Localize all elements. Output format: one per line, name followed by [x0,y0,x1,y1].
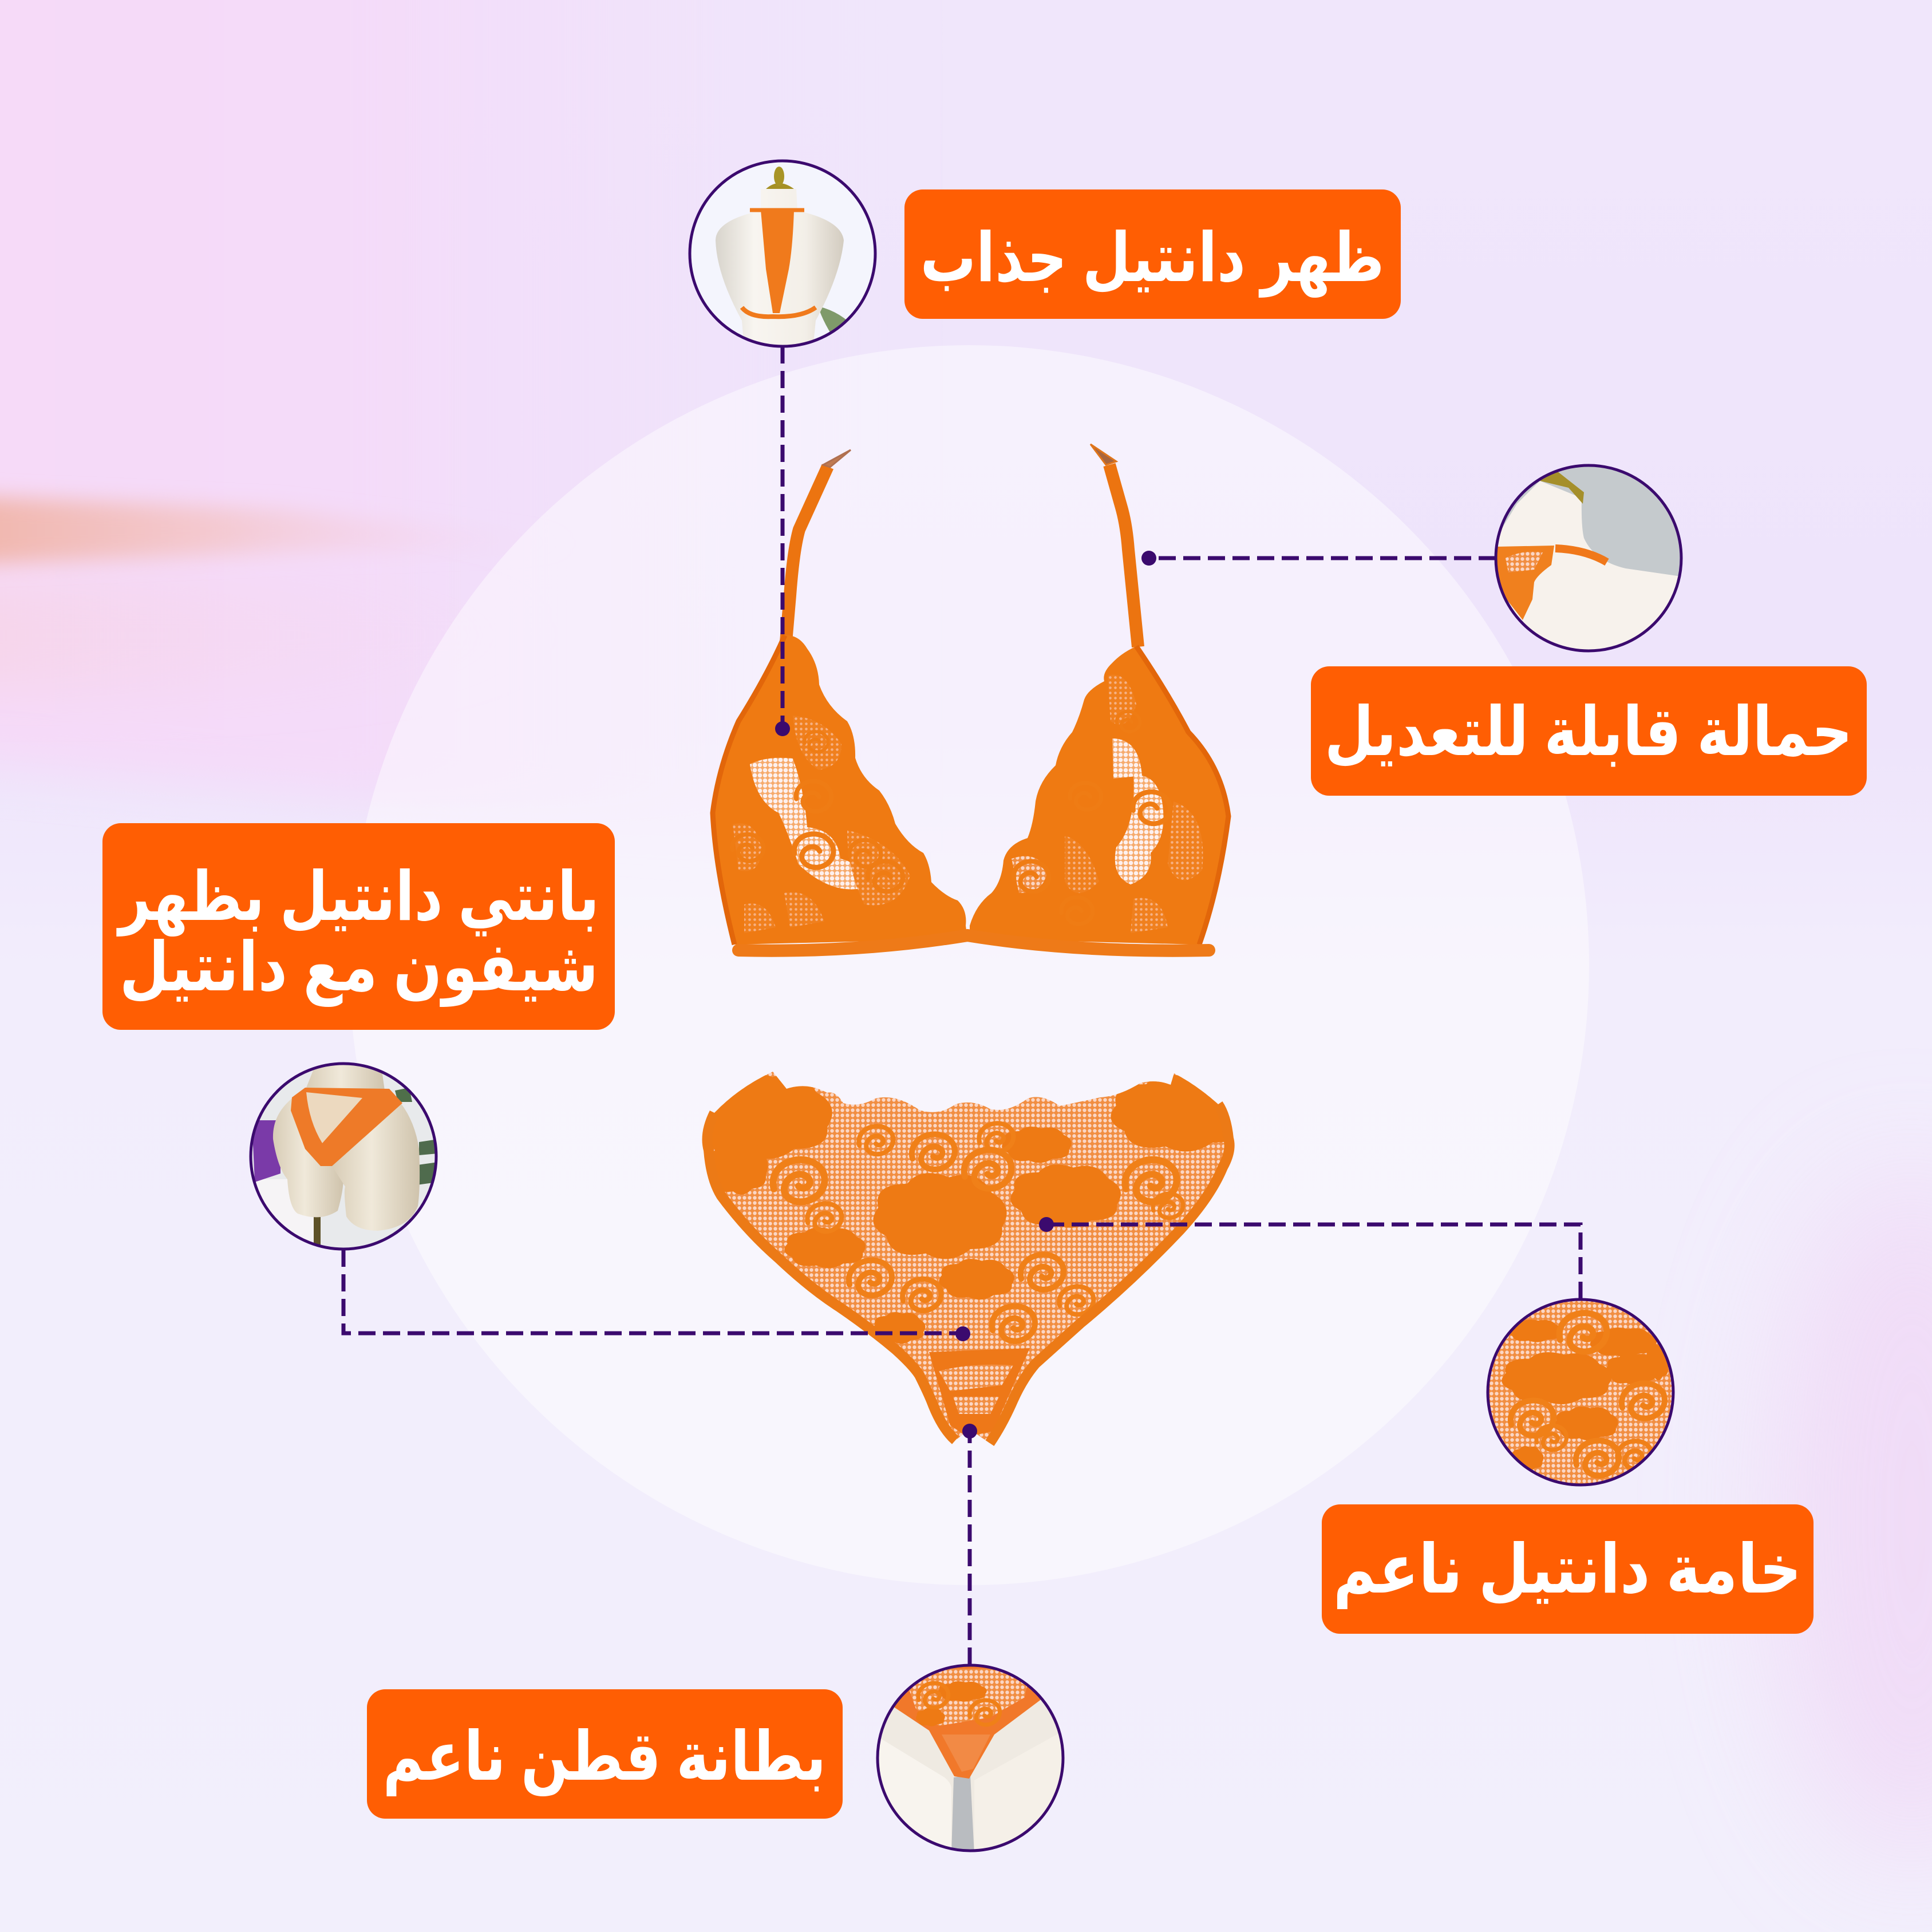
thumbnail: shoulder strap [1494,464,1683,653]
label: soft lace fabric: خامة دانتيل ناعم [1333,1532,1801,1609]
right cup [967,641,1236,950]
label: lace panty with chiffon back [102,823,615,1030]
straps [785,467,828,649]
panty edge [708,1113,955,1440]
thumbnail: lace close-up [1483,1294,1677,1488]
label: soft cotton lining [367,1689,843,1819]
connector dots [775,551,1156,1439]
gusset [929,1348,1030,1437]
thumbnail: gusset on mannequin [873,1660,1068,1855]
bra garment [704,444,1236,951]
central pale circle [349,345,1589,1585]
label: lace panty with chiffon back: بانتي دانتيل بظهر [116,859,599,937]
thumbnail: panty on mannequin [246,1059,441,1254]
thumbnail: back of mannequin [687,157,879,349]
right cup edge [1136,646,1228,945]
connector lines [343,346,1581,1665]
label: soft cotton lining: بطانة قطن ناعم [383,1718,826,1797]
label: lace panty with chiffon back: شيفون مع دانتيل [120,930,598,1007]
label: back lace [904,189,1401,319]
panty garment [693,1065,1250,1448]
label: adjustable strap [1311,666,1867,796]
left cup edge [713,635,785,945]
label: soft lace fabric [1322,1504,1814,1634]
label: back lace: ظهر دانتيل جذاب [920,220,1384,298]
left cup [716,636,966,945]
label: adjustable strap: حمالة قابلة للتعديل [1325,694,1852,770]
under band [738,935,1209,951]
